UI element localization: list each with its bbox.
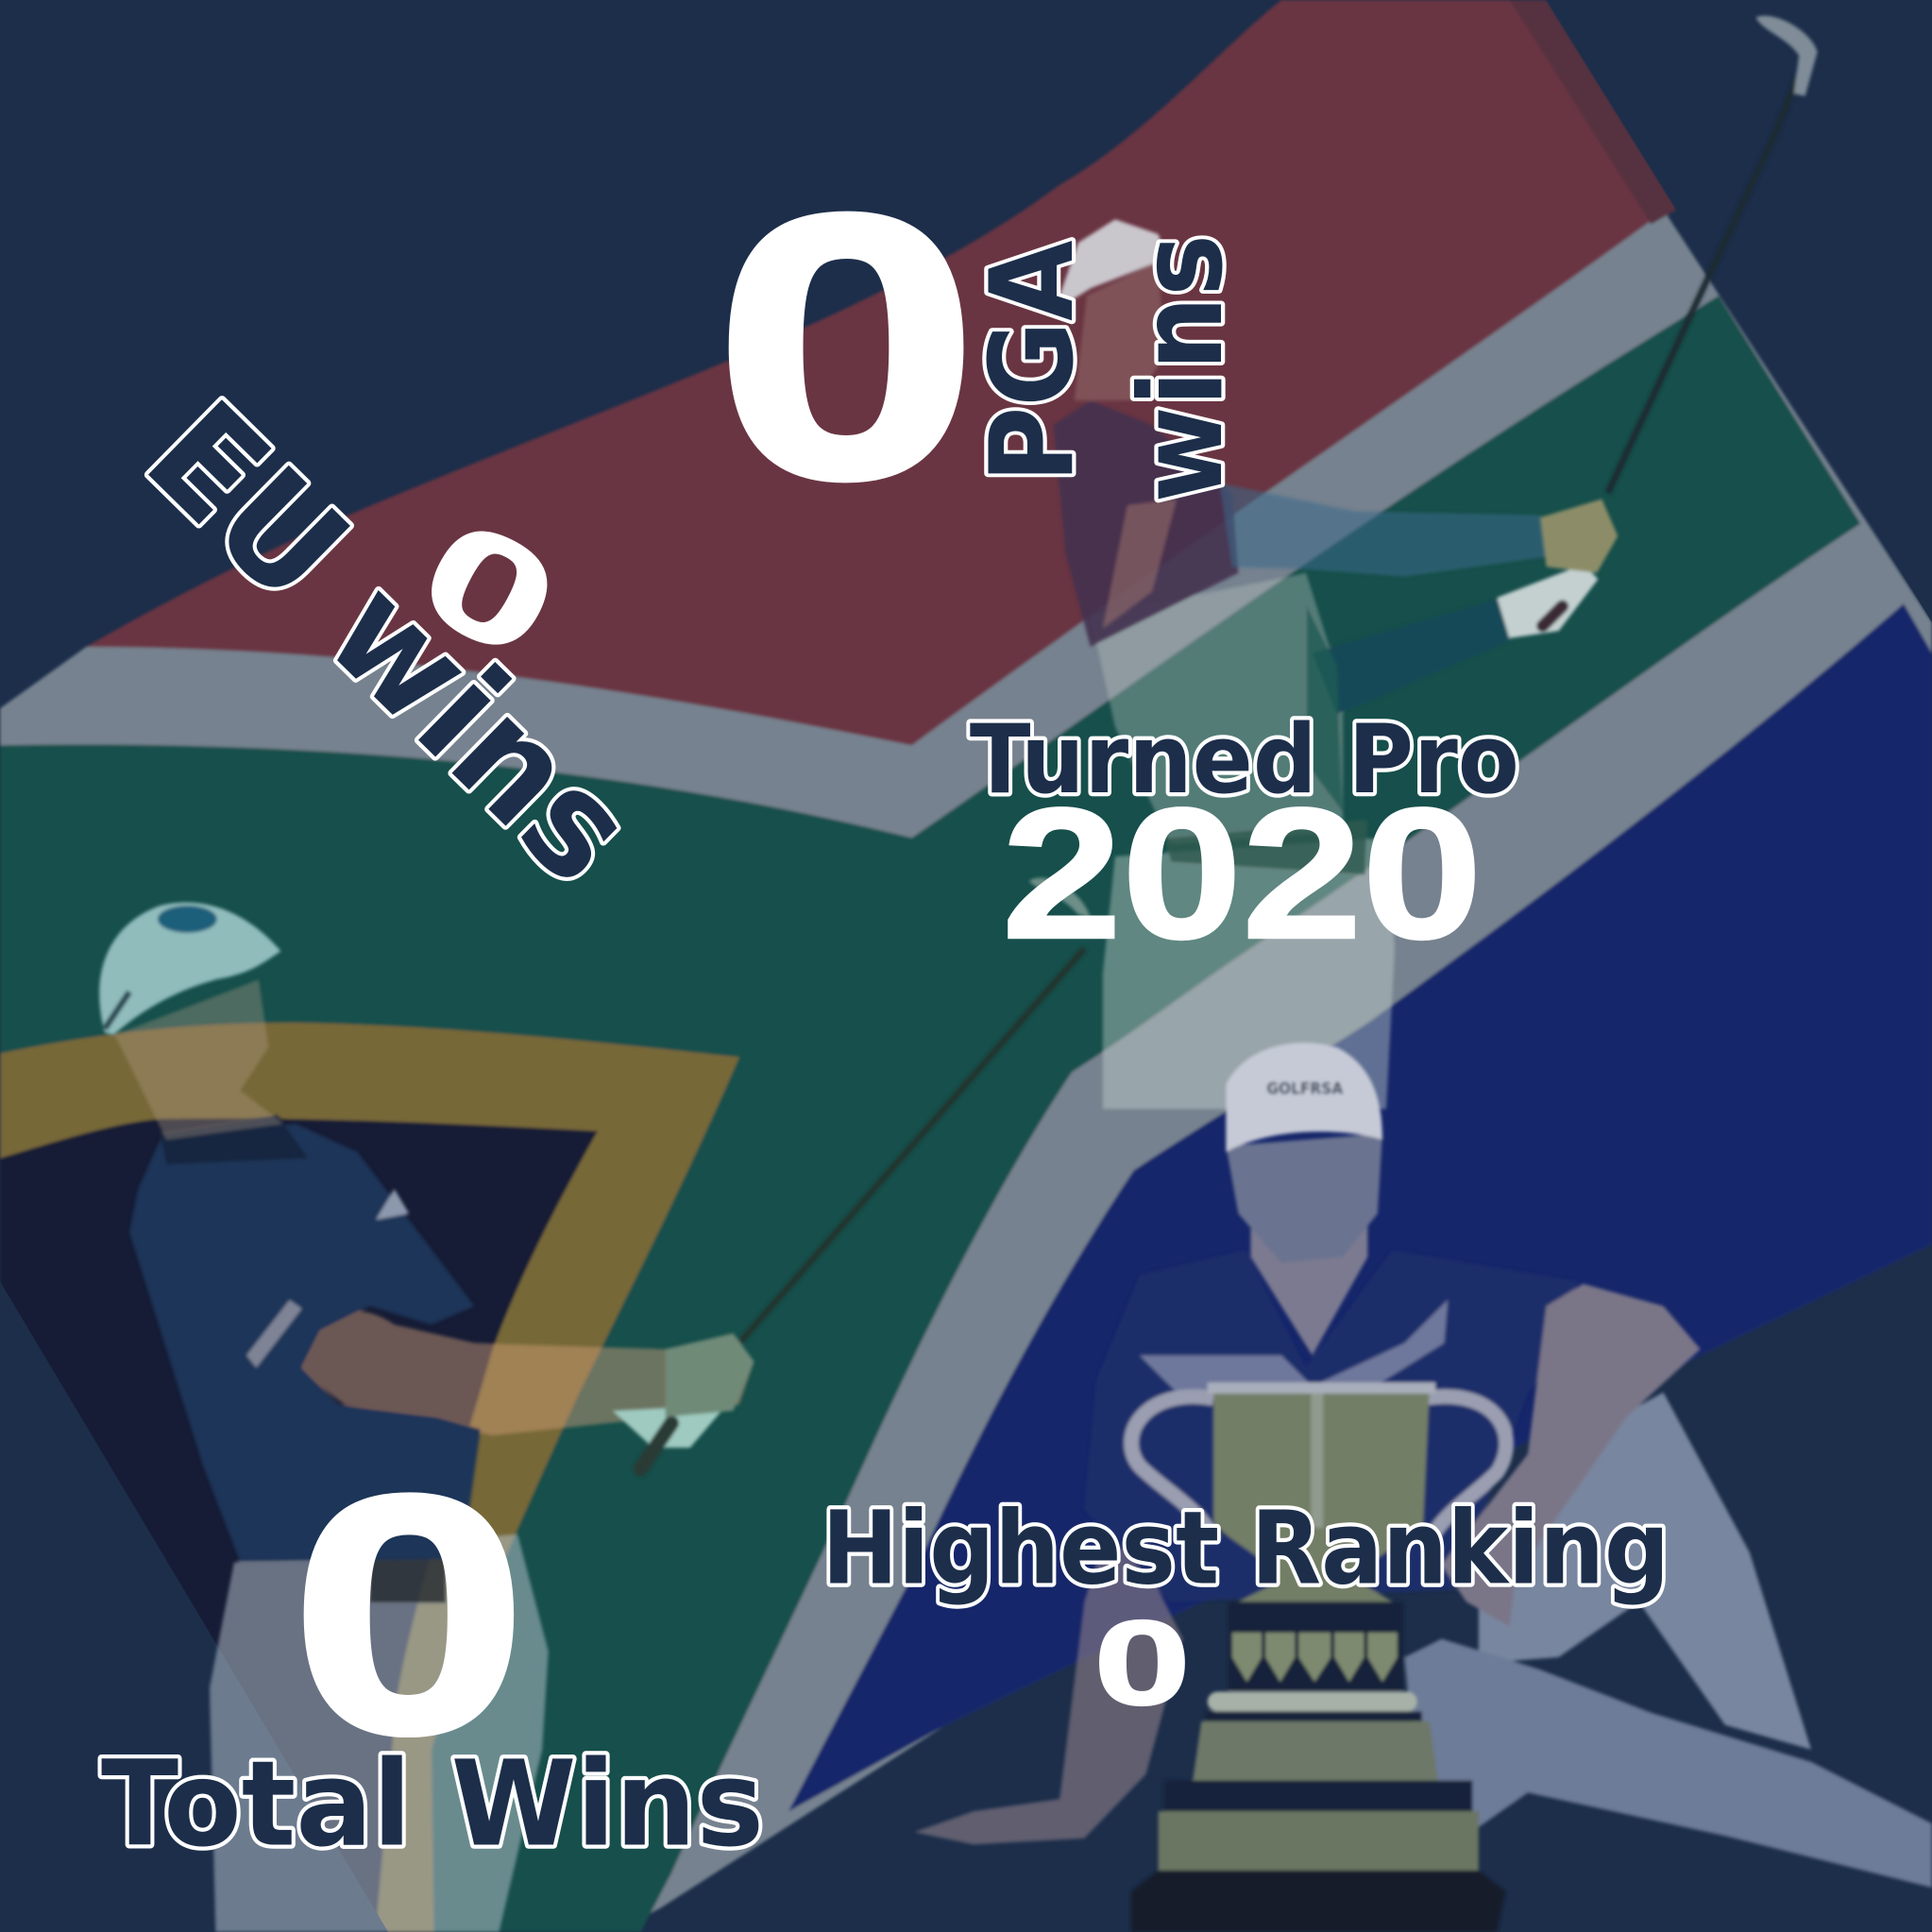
forearm	[296, 1311, 754, 1435]
cup highlight	[1311, 1392, 1323, 1528]
shirt	[1084, 1250, 1577, 1602]
glove	[613, 1405, 727, 1448]
cup rim	[1208, 1382, 1435, 1394]
belt buckle	[369, 1559, 446, 1603]
stat: total wins label: Total Wins	[101, 1735, 764, 1873]
cap logo: GOLFRSA	[1266, 1079, 1344, 1098]
stat: EU wins label: EU wins	[115, 371, 665, 916]
cap	[1059, 219, 1167, 303]
plinth	[1131, 1871, 1506, 1932]
pants	[210, 1534, 549, 1932]
stat: PGA label: PGA	[965, 240, 1099, 483]
side of torso	[1306, 603, 1343, 813]
club head	[1755, 16, 1818, 96]
grip	[641, 1423, 671, 1468]
cap	[99, 903, 281, 1035]
extended leg	[1405, 1638, 1932, 1888]
cap badge	[158, 906, 217, 933]
lower arm sleeve	[1313, 598, 1509, 715]
upper arm sleeve	[1220, 483, 1547, 577]
shirt band	[1140, 1300, 1448, 1398]
stat: highest ranking label: Highest Ranking	[822, 1491, 1669, 1608]
flag: dark red fold	[1509, 0, 1677, 224]
stat: EU wins value: 0	[395, 486, 584, 691]
heart band	[1229, 1602, 1403, 1690]
shirt stripes	[1103, 499, 1177, 628]
neck and face	[114, 979, 283, 1140]
face	[1075, 262, 1164, 400]
stat: total wins value: 0	[291, 1425, 527, 1803]
player: seated golfer with trophy	[914, 1042, 1932, 1932]
shirt	[129, 1124, 481, 1563]
dark ring under pearls	[1205, 1711, 1422, 1721]
pearl ring	[1208, 1692, 1417, 1711]
stat: turned pro year: 2020	[1002, 770, 1483, 977]
sleeve logo	[246, 1300, 302, 1367]
torso upper	[1054, 400, 1238, 647]
flag: red stripe	[86, 0, 1664, 745]
trophy	[1131, 1382, 1506, 1932]
club shaft	[1608, 68, 1802, 493]
cup	[1213, 1390, 1430, 1602]
glove	[1497, 565, 1598, 638]
player: left golfer	[99, 877, 1091, 1932]
pants	[1103, 838, 1395, 1109]
bent arm	[1442, 1284, 1701, 1626]
cap	[1226, 1042, 1382, 1152]
base lower	[1159, 1811, 1479, 1873]
torso lower	[1091, 573, 1343, 844]
hand	[666, 1333, 754, 1417]
hearts	[1232, 1633, 1398, 1682]
hand	[1540, 499, 1618, 573]
belt	[1164, 820, 1367, 874]
flag: gold triangle band	[0, 1023, 739, 1932]
base upper	[1193, 1721, 1438, 1781]
handles	[1131, 1397, 1506, 1540]
club shaft	[739, 949, 1084, 1343]
grip	[1543, 606, 1563, 626]
flag: dark triangle	[0, 1118, 598, 1932]
stat: highest ranking value: 0	[1094, 1596, 1190, 1730]
dark base ring	[1164, 1781, 1472, 1812]
cap stripe	[105, 991, 129, 1029]
shirt logo	[376, 1189, 409, 1220]
stat: wins label: wins	[1114, 234, 1248, 502]
shirt collar	[161, 1115, 308, 1164]
face	[1226, 1133, 1382, 1263]
raised leg	[1479, 1392, 1811, 1750]
neck	[1250, 1220, 1367, 1355]
club head	[1029, 877, 1091, 918]
supporting arm	[914, 1503, 1183, 1844]
flag: blue stripe	[788, 603, 1932, 1811]
stat: turned pro label: Turned Pro	[970, 704, 1519, 815]
player: top right golfer	[1054, 16, 1818, 1109]
stat: PGA wins value: 0	[715, 138, 978, 555]
